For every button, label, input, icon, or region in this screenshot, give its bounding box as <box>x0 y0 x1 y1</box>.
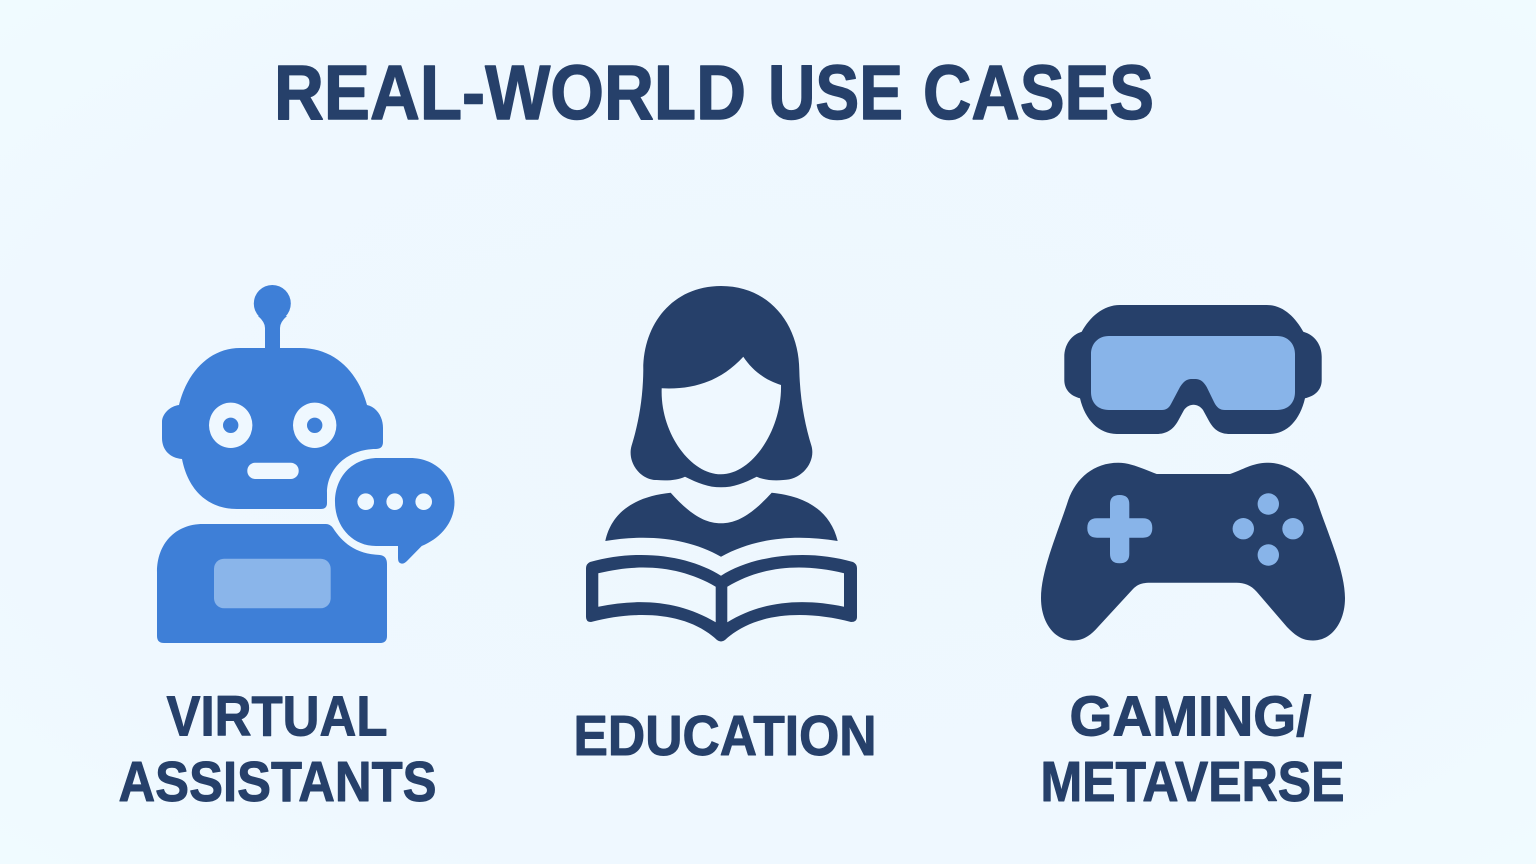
label: gaming / metaverse: GAMING/ <box>1070 684 1312 748</box>
robot head <box>162 348 383 509</box>
headset frame <box>1064 305 1322 434</box>
label: virtual assistants: VIRTUAL <box>166 684 388 748</box>
label: gaming / metaverse: METAVERSE <box>1040 750 1344 813</box>
headset lens <box>1091 336 1295 410</box>
title: REAL-WORLD <box>274 50 746 136</box>
shoulders <box>605 493 838 557</box>
open book <box>586 555 857 642</box>
icon: person reading a book <box>586 286 857 642</box>
face <box>662 357 781 474</box>
label: virtual assistants <box>118 684 436 813</box>
chat bubble <box>335 458 454 564</box>
icon: VR headset <box>1064 305 1322 434</box>
icon: robot with chat bubble <box>157 285 454 643</box>
robot antenna <box>254 285 291 349</box>
controller body <box>1041 463 1345 640</box>
robot body <box>157 524 387 643</box>
title: USE <box>768 50 903 136</box>
label: virtual assistants: ASSISTANTS <box>118 750 436 813</box>
robot eyes <box>209 403 336 448</box>
icon: game controller <box>1041 463 1345 640</box>
title: CASES <box>923 50 1154 136</box>
title <box>274 50 1154 136</box>
controller buttons <box>1233 493 1304 566</box>
label: gaming / metaverse <box>1040 684 1344 813</box>
robot mouth <box>247 463 299 479</box>
d-pad <box>1087 495 1152 563</box>
robot chest panel <box>214 559 331 608</box>
label: education: EDUCATION <box>574 704 876 767</box>
hair <box>631 286 812 487</box>
